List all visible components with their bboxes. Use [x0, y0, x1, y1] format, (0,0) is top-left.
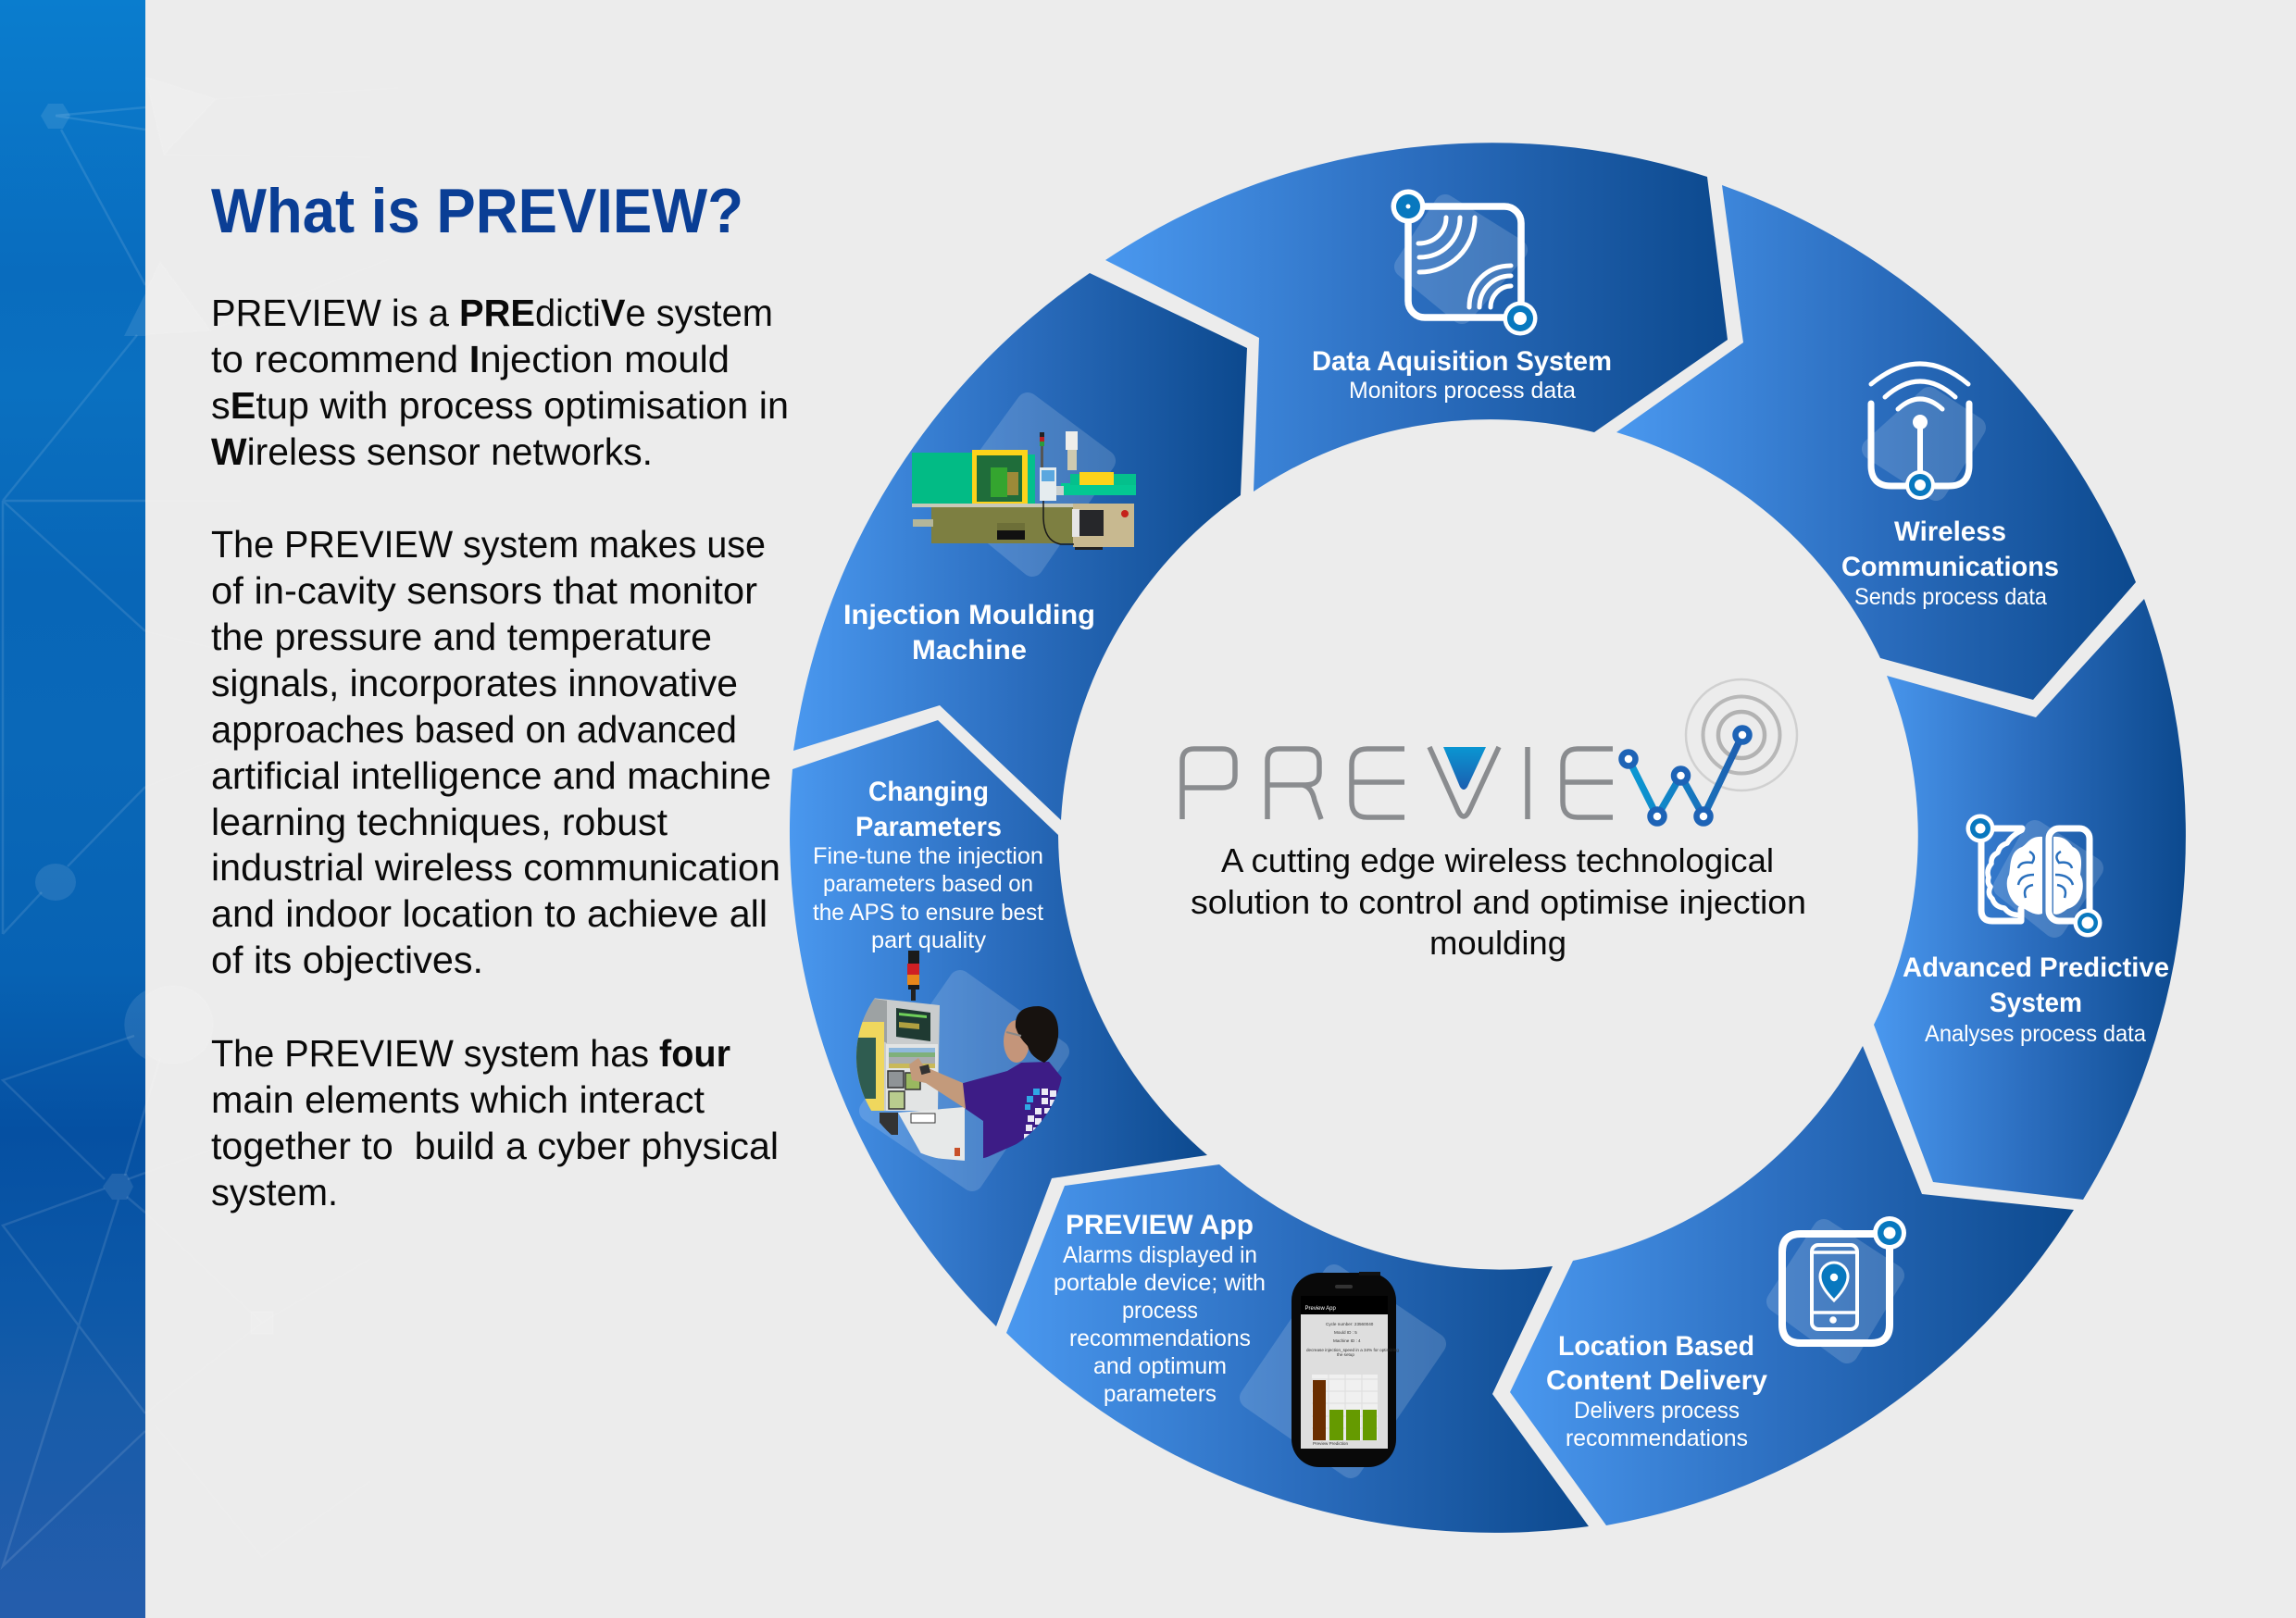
text: preview app description: [1054, 1242, 1266, 1407]
closing paragraph: system.: [211, 1171, 338, 1214]
text: changing parameters description: part quality: [871, 927, 987, 953]
heading: injection moulding machine: [843, 600, 1095, 666]
heading: advanced predictive system: [1903, 952, 2169, 1018]
photo: operator at machine panel: [856, 951, 1065, 1161]
heading: data acquisition: Data Aquisition System: [1312, 346, 1612, 377]
text: preview app description: process: [1122, 1298, 1198, 1324]
icon: brain: [1966, 815, 2102, 937]
description paragraph: The PREVIEW system makes use: [211, 523, 766, 566]
text: preview app description: and optimum: [1093, 1353, 1227, 1379]
icon: smartphone with app chart: Preview Prediction: [1313, 1441, 1348, 1446]
icon: smartphone with app chart: decrease injection_speed in a 34% for optimizing: [1306, 1348, 1399, 1352]
heading: changing parameters: Parameters: [855, 812, 1002, 842]
description paragraph: industrial wireless communication: [211, 846, 780, 889]
heading: injection moulding machine: Machine: [912, 635, 1027, 666]
description paragraph: the pressure and temperature: [211, 616, 712, 658]
faint network pattern on background: [124, 77, 398, 1557]
text: preview app description: recommendations: [1069, 1326, 1251, 1351]
heading: changing parameters: [855, 777, 1002, 842]
heading: advanced predictive system: System: [1990, 988, 2082, 1018]
heading: wireless communications: [1841, 517, 2059, 582]
intro paragraph: PREVIEW is a PREdictiVe system: [211, 292, 773, 334]
intro paragraph: sEtup with process optimisation in: [211, 384, 789, 427]
intro paragraph: to recommend Injection mould: [211, 338, 730, 380]
icon: phone location: [1782, 1216, 1906, 1343]
icon: smartphone with app chart: [1292, 1272, 1399, 1467]
icon: wireless antenna: [1871, 364, 1969, 500]
description paragraph: of its objectives.: [211, 939, 483, 981]
text: location description: [1566, 1398, 1748, 1451]
heading: changing parameters: Changing: [868, 777, 989, 807]
text: location description: recommendations: [1566, 1425, 1748, 1451]
heading: location based content delivery: Content Delivery: [1546, 1365, 1767, 1396]
text: changing parameters description: the APS to ensure best: [813, 900, 1043, 926]
closing paragraph: main elements which interact: [211, 1078, 705, 1121]
icon: injection moulding machine: [912, 431, 1136, 550]
left sidebar band: [0, 0, 160, 1618]
text: preview app description: Alarms displayed in: [1063, 1242, 1257, 1268]
center tagline: A cutting edge wireless technological: [1221, 841, 1774, 879]
heading: wireless communications: Communications: [1841, 552, 2059, 582]
intro paragraph: Wireless sensor networks.: [211, 430, 653, 473]
panel: location based content delivery: [1510, 1046, 2074, 1525]
panel: injection moulding machine: [793, 273, 1247, 820]
center tagline: solution to control and optimise injection: [1191, 883, 1806, 921]
text: preview app description: portable device; with: [1054, 1270, 1266, 1296]
heading: preview app: PREVIEW App: [1066, 1210, 1254, 1240]
closing paragraph: together to build a cyber physical: [211, 1125, 779, 1167]
heading: location based content delivery: [1546, 1331, 1767, 1396]
text: changing parameters description: Fine-tune the injection: [813, 843, 1043, 869]
closing paragraph: [211, 1032, 779, 1214]
panel: changing parameters: [790, 720, 1207, 1326]
text: data acquisition description: Monitors process data: [1349, 378, 1576, 404]
title: What is PREVIEW?: [211, 176, 743, 246]
icon: smartphone with app chart: Mould ID : 5: [1334, 1330, 1357, 1335]
panel: wireless communications: [1616, 185, 2136, 700]
heading: advanced predictive system: Advanced Predictive: [1903, 952, 2169, 983]
text: preview app description: parameters: [1104, 1381, 1217, 1407]
text: location description: Delivers process: [1574, 1398, 1740, 1424]
description paragraph: of in-cavity sensors that monitor: [211, 569, 757, 612]
text: changing parameters description: [813, 843, 1043, 953]
closing paragraph: The PREVIEW system has four: [211, 1032, 730, 1075]
panel: data acquisition system: [1105, 143, 1728, 492]
description paragraph: signals, incorporates innovative: [211, 662, 738, 704]
description paragraph: learning techniques, robust: [211, 801, 668, 843]
center logo: PREVIEW: [1182, 679, 1797, 824]
text: advanced description: Analyses process data: [1925, 1021, 2146, 1047]
center tagline: moulding: [1429, 924, 1566, 962]
icon: data acquisition: [1391, 189, 1537, 335]
panel: preview app: [1006, 1164, 1589, 1533]
description paragraph: artificial intelligence and machine: [211, 754, 771, 797]
text: changing parameters description: parameters based on: [823, 871, 1033, 897]
center tagline: [1191, 841, 1806, 962]
icon: smartphone with app chart: Preview App: [1305, 1306, 1337, 1312]
icon: smartphone with app chart: Machine ID : 4: [1333, 1338, 1361, 1343]
description paragraph: [211, 523, 780, 981]
text: wireless description: Sends process data: [1854, 584, 2047, 610]
heading: injection moulding machine: Injection Moulding: [843, 600, 1095, 630]
heading: location based content delivery: Location Based: [1558, 1331, 1754, 1362]
heading: wireless communications: Wireless: [1894, 517, 2006, 547]
intro paragraph: [211, 292, 789, 473]
icon: smartphone with app chart: the setup: [1337, 1352, 1354, 1357]
description paragraph: and indoor location to achieve all: [211, 892, 767, 935]
panel: advanced predictive system: [1874, 599, 2186, 1200]
icon: smartphone with app chart: Cycle number: 23560040: [1326, 1322, 1374, 1326]
description paragraph: approaches based on advanced: [211, 708, 737, 751]
